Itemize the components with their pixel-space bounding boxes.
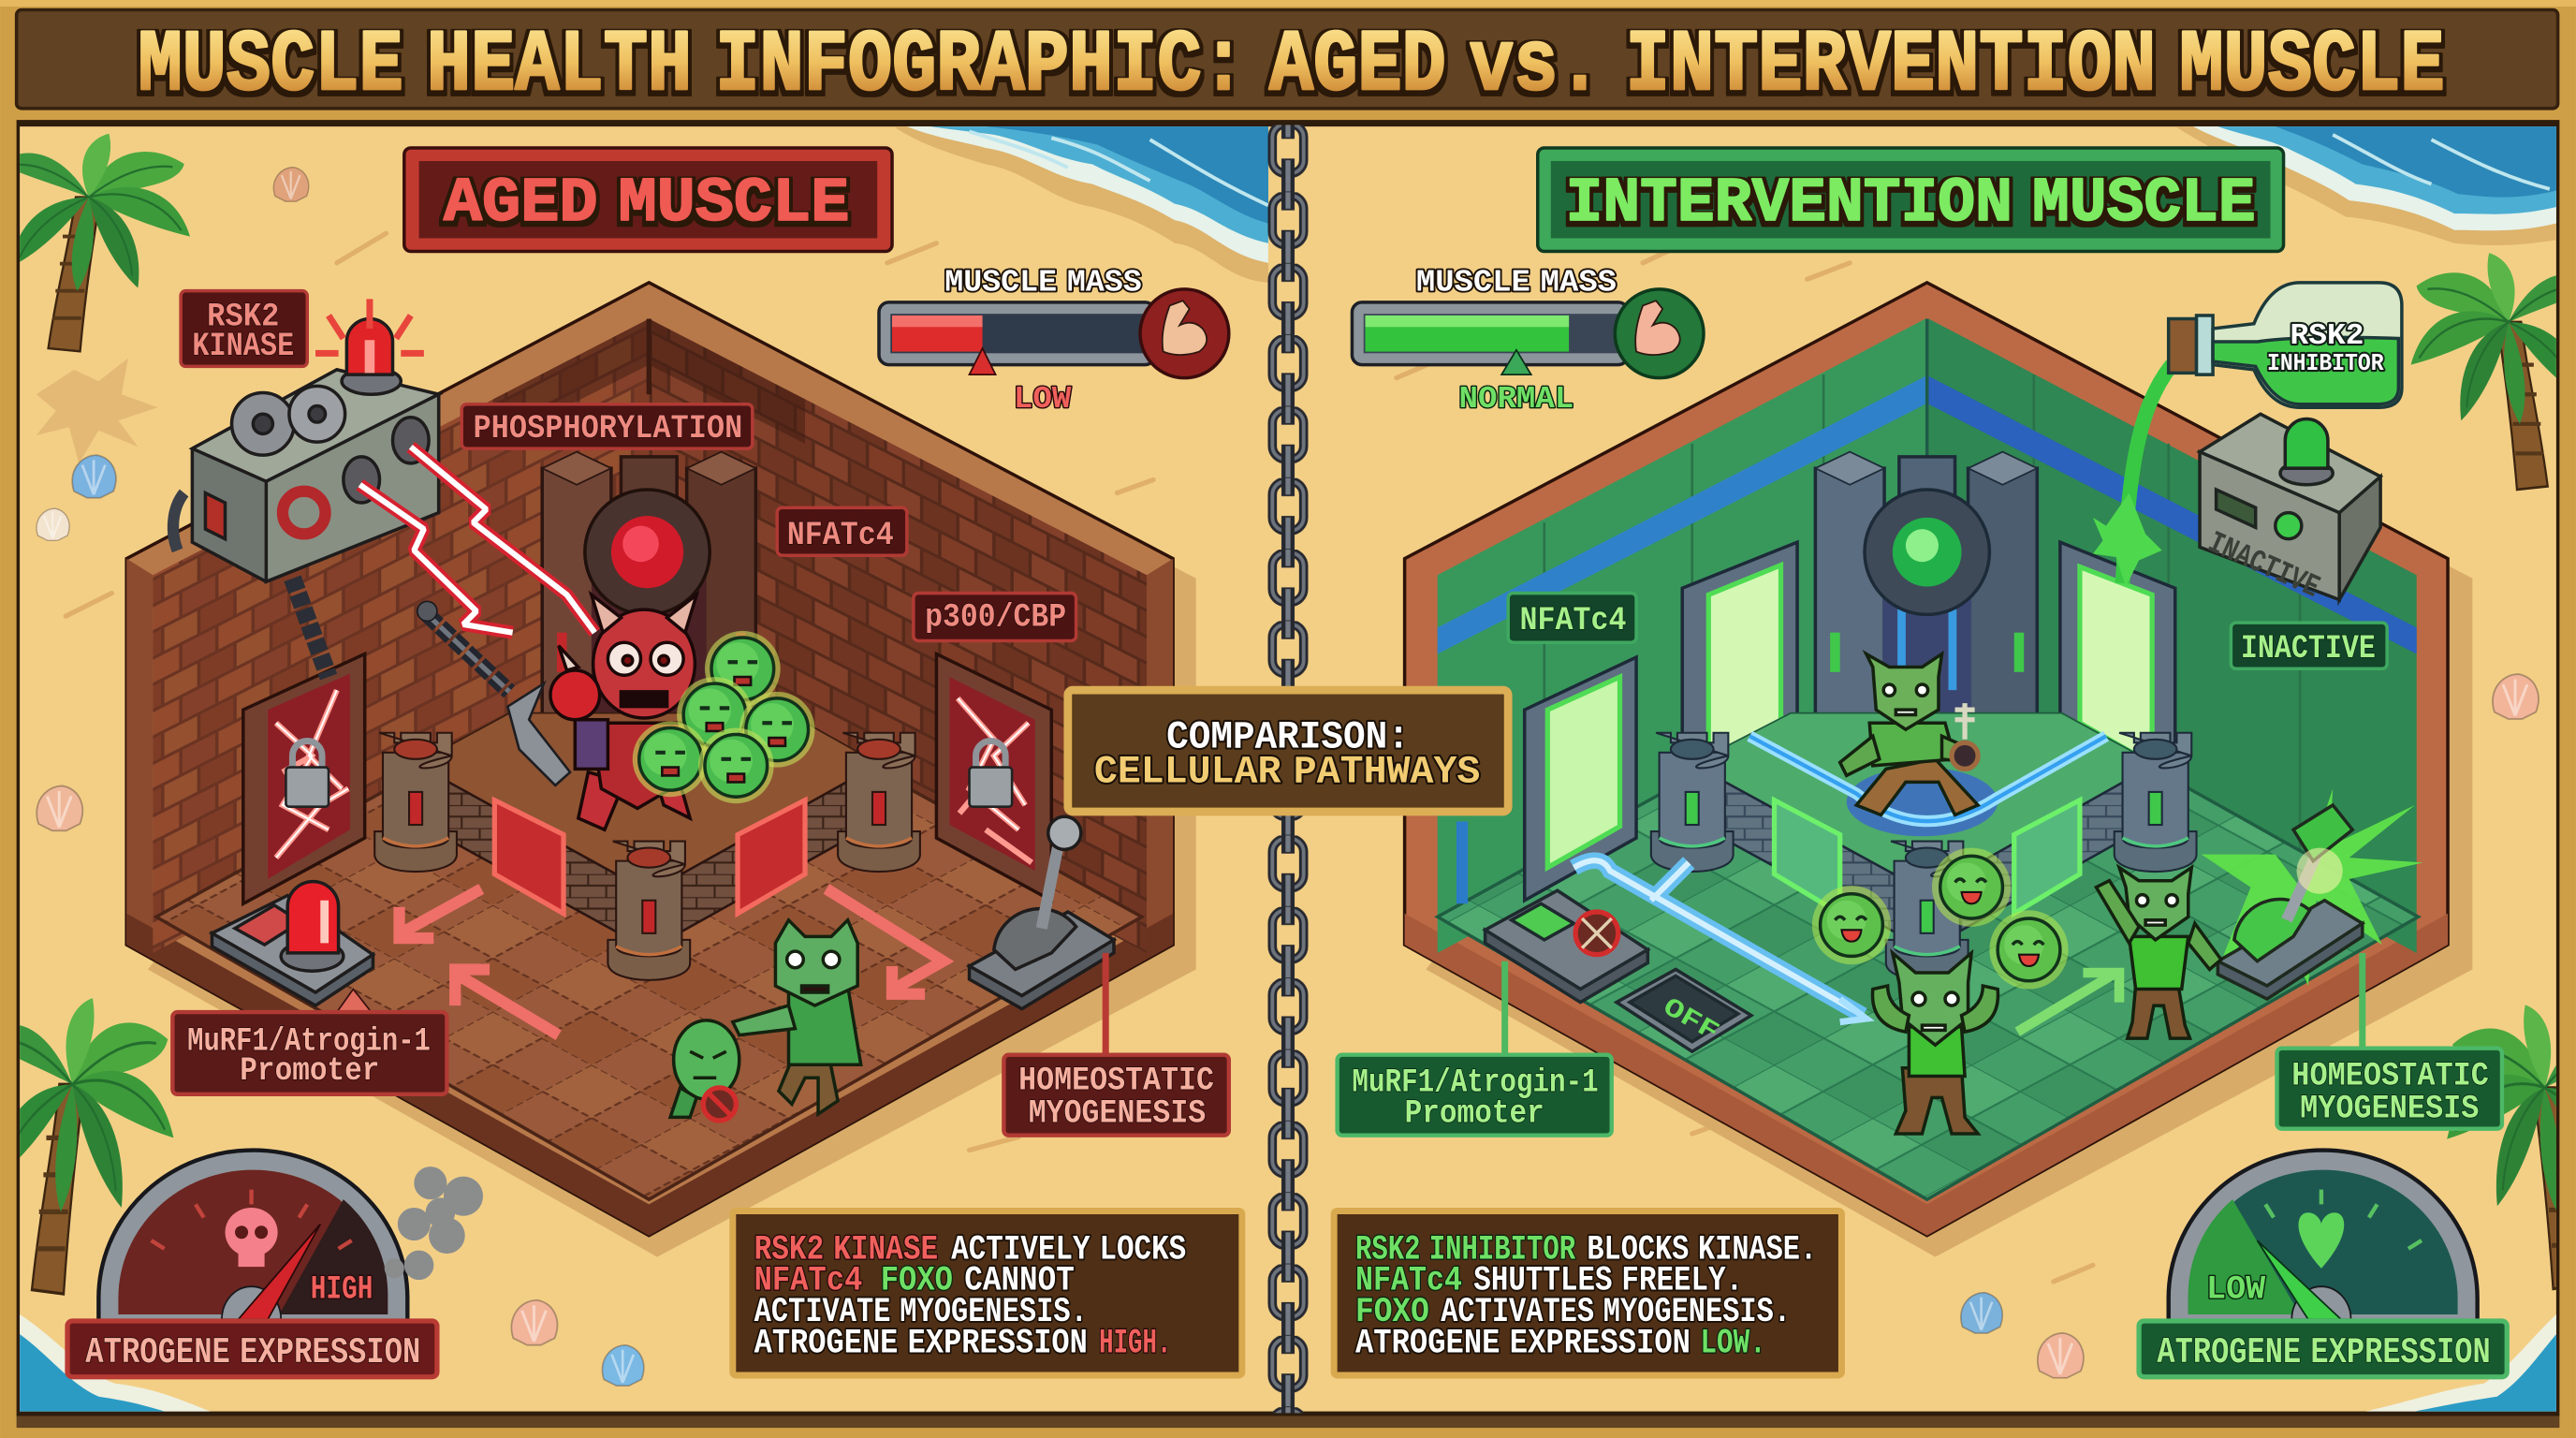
label: atrogene expression intervention <box>2139 1321 2507 1377</box>
label: homeostatic myogenesis aged: MYOGENESIS <box>1029 1095 1206 1133</box>
off switch <box>1617 969 1751 1051</box>
heading: aged muscle <box>404 148 892 252</box>
panel: intervention muscle room <box>1405 283 2472 1257</box>
sea: bottom left <box>20 1314 211 1412</box>
green connector: promoter <box>1501 961 1508 1055</box>
text panel: aged summary: FOXO <box>881 1262 953 1301</box>
label: atrogene expression aged: ATROGENE EXPRESSION <box>85 1332 420 1373</box>
comparison callout <box>1068 690 1508 812</box>
inhibited promoter plate <box>1486 890 1647 1003</box>
muscle mass gauge: aged <box>879 266 1229 418</box>
label: murf1 promoter intervention <box>1338 1055 1612 1136</box>
sea: top middle <box>894 126 1268 283</box>
label: p300/cbp: p300/CBP <box>925 599 1066 637</box>
right wall <box>649 318 1147 953</box>
strong goblin front <box>1872 953 1998 1134</box>
inactive machine <box>2200 414 2380 607</box>
label: atrogene expression intervention: ATROGENE EXPRESSION <box>2157 1332 2491 1373</box>
central chain divider <box>1266 125 1310 1413</box>
label: homeostatic myogenesis intervention <box>2277 1049 2502 1129</box>
connector to myogenesis <box>1103 953 1109 1055</box>
label: homeostatic myogenesis intervention: HOMEOSTATIC <box>2291 1057 2489 1094</box>
green connector: myogenesis <box>2359 953 2365 1047</box>
central platform <box>374 713 920 980</box>
central platform <box>1651 713 2197 980</box>
label: rsk2 kinase: KINASE <box>192 328 294 365</box>
needle <box>239 1224 320 1319</box>
front left open door <box>1525 657 1636 901</box>
back right open door <box>2060 542 2175 788</box>
heart icon <box>2299 1212 2344 1269</box>
lightning bolts <box>359 447 594 633</box>
text panel: intervention summary: ACTIVATES MYOGENESIS. <box>1441 1293 1791 1332</box>
goblin with key <box>1840 654 1978 814</box>
rsk2 inhibitor bottle <box>2169 283 2402 407</box>
gate with green orb <box>1815 452 2037 723</box>
heading: aged muscle: AGED MUSCLE <box>444 169 849 240</box>
right wall stripe <box>1928 376 2417 654</box>
alarm rays <box>315 299 424 353</box>
bottle label: RSK2 <box>2291 320 2364 353</box>
floor <box>156 731 1142 1199</box>
left wall <box>1438 318 1925 953</box>
panel: aged muscle room <box>126 283 1196 1257</box>
palm tree: top right <box>2411 253 2556 491</box>
off switch: OFF <box>1658 993 1723 1048</box>
trapped slimes <box>633 631 815 803</box>
skull icon <box>225 1208 278 1267</box>
cheering goblin right <box>2096 868 2221 1038</box>
side chain <box>173 493 184 550</box>
label: rsk2 kinase: RSK2 <box>207 298 279 335</box>
sea: bottom right <box>2365 1314 2556 1412</box>
palm tree: bottom left <box>20 998 174 1296</box>
text panel: intervention summary: NFATc4 <box>1355 1262 1462 1301</box>
sad goblin <box>733 920 861 1114</box>
key <box>1952 703 1978 769</box>
atrogene gauge: low <box>2169 1151 2478 1323</box>
title band <box>0 0 2576 115</box>
blue floor circuit <box>1462 822 1866 1022</box>
text panel: intervention summary: LOW. <box>1701 1324 1766 1363</box>
left locked door <box>243 654 365 903</box>
starburst around lever <box>2202 788 2423 986</box>
muscle mass gauge: intervention: NORMAL <box>1459 382 1573 418</box>
muscle mass gauge: intervention: MUSCLE MASS <box>1416 266 1617 301</box>
label: homeostatic myogenesis aged <box>1003 1055 1229 1136</box>
atrogene gauge: low: LOW <box>2206 1270 2266 1308</box>
text panel: intervention summary: FOXO <box>1355 1293 1429 1332</box>
label: murf1 promoter aged <box>172 1012 446 1094</box>
text panel: aged summary: CANNOT <box>964 1262 1075 1301</box>
muscle mass gauge: aged: LOW <box>1014 382 1071 418</box>
lever <box>970 816 1114 1009</box>
comparison callout: CELLULAR PATHWAYS <box>1094 749 1480 794</box>
heading: intervention muscle <box>1538 148 2284 252</box>
label: nfatc4 intervention: NFATc4 <box>1519 602 1627 639</box>
happy slimes <box>1812 848 2069 990</box>
label: murf1 promoter intervention: MuRF1/Atrogin-1 <box>1352 1064 1599 1101</box>
heading: intervention muscle: INTERVENTION MUSCLE <box>1566 169 2256 240</box>
sea: top right <box>2175 126 2556 245</box>
label: phosphorylation: PHOSPHORYLATION <box>474 410 742 448</box>
left wall stripe <box>1438 376 1925 654</box>
palm tree: top left <box>0 134 190 351</box>
floor arrows <box>400 888 943 1035</box>
atrogene gauge: high: HIGH <box>311 1270 373 1308</box>
text panel: aged summary: HIGH. <box>1099 1324 1171 1363</box>
muscle mass gauge: aged: MUSCLE MASS <box>944 266 1142 301</box>
palm tree: bottom right <box>2447 1005 2556 1290</box>
label: murf1 promoter intervention: Promoter <box>1405 1095 1544 1133</box>
right locked door <box>936 654 1051 901</box>
floor <box>1438 731 2418 1199</box>
text panel: intervention summary: BLOCKS KINASE. <box>1587 1230 1817 1269</box>
green arrow <box>2017 973 2119 1032</box>
bottle label second line: INHIBITOR <box>2267 349 2384 377</box>
comparison callout: COMPARISON: <box>1166 715 1410 760</box>
devil kinase character <box>550 594 696 829</box>
text panel: aged summary <box>733 1211 1242 1375</box>
text panel: aged summary: ACTIVELY LOCKS <box>951 1230 1186 1269</box>
back left open door <box>1682 542 1797 788</box>
text panel: intervention summary: RSK2 INHIBITOR <box>1355 1230 1576 1269</box>
text panel: aged summary: NFATc4 <box>754 1262 862 1301</box>
shrunken slime goblin <box>670 1020 739 1121</box>
right wall <box>1928 318 2417 953</box>
kinase machine <box>192 318 439 581</box>
glowing lever <box>2217 805 2363 999</box>
label: murf1 promoter aged: MuRF1/Atrogin-1 <box>187 1022 431 1060</box>
label: homeostatic myogenesis aged: HOMEOSTATIC <box>1018 1063 1214 1100</box>
label: atrogene expression aged <box>67 1321 437 1377</box>
pointer to promoter <box>337 990 372 1012</box>
left wall <box>153 318 649 953</box>
floor alarm <box>212 882 373 1005</box>
label: nfatc4 aged: NFATc4 <box>787 517 894 554</box>
label: murf1 promoter aged: Promoter <box>240 1052 379 1090</box>
gate with red orb <box>542 452 755 723</box>
muscle mass gauge: intervention <box>1352 266 1704 418</box>
pouring inhibitor <box>2093 365 2172 587</box>
palm shadow: top left <box>37 359 158 463</box>
text panel: aged summary: ACTIVATE MYOGENESIS. <box>754 1293 1088 1332</box>
label: rsk2 kinase <box>181 291 307 366</box>
label: inactive: INACTIVE <box>2241 630 2376 668</box>
label: homeostatic myogenesis intervention: MYOGENESIS <box>2300 1090 2479 1127</box>
text panel: aged summary: RSK2 KINASE <box>754 1230 938 1269</box>
text panel: aged summary: ATROGENE EXPRESSION <box>754 1324 1088 1363</box>
gauge smoke <box>385 1167 483 1280</box>
chain and clamp <box>417 601 570 785</box>
label: nfatc4 intervention <box>1508 594 1636 642</box>
inactive engraved text: INACTIVE <box>2203 526 2324 607</box>
machine chain <box>292 579 329 677</box>
text panel: intervention summary <box>1334 1211 1841 1375</box>
text panel: intervention summary: ATROGENE EXPRESSION <box>1355 1324 1690 1363</box>
blue energy pool <box>1749 736 2106 836</box>
needle <box>2257 1240 2341 1319</box>
atrogene gauge: high <box>98 1151 407 1323</box>
text panel: intervention summary: SHUTTLES FREELY. <box>1473 1262 1743 1301</box>
